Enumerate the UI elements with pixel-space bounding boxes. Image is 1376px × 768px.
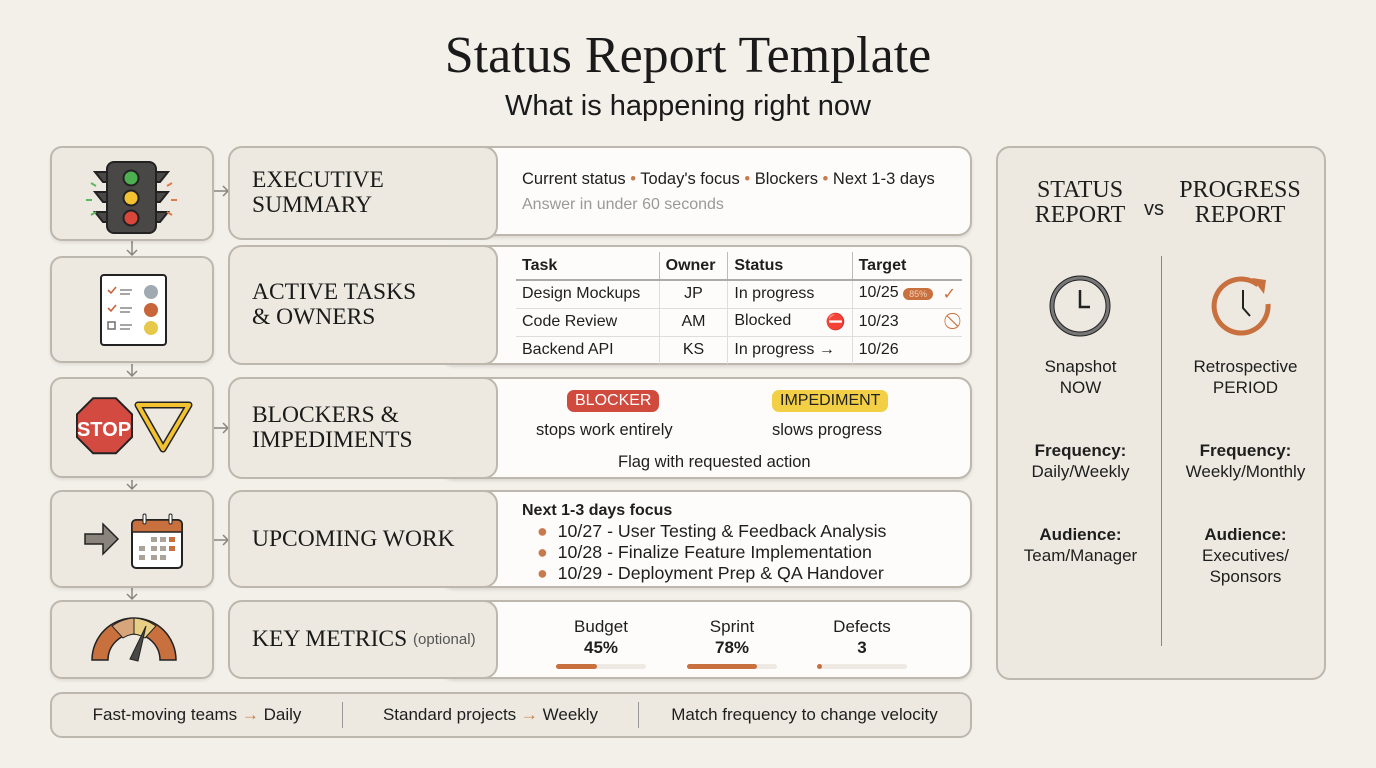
- label: key metrics: (optional): [413, 631, 476, 648]
- icon: checklist: [50, 256, 214, 363]
- metric sprint: 78%: [715, 638, 749, 657]
- content: task table: 10/25 85%: [859, 284, 927, 301]
- label: executive summary: EXECUTIVE: [252, 167, 384, 193]
- impediment badge: IMPEDIMENT: [780, 392, 880, 409]
- content: upcoming list: ● 10/28 - Finalize Feature Implementation: [537, 542, 872, 562]
- content: blockers: stops work entirely: [536, 421, 673, 439]
- text: progress column: [1186, 357, 1306, 586]
- metric budget: [556, 617, 646, 669]
- content: task table: In progress →: [734, 341, 835, 358]
- label: executive summary: [228, 146, 498, 240]
- icon: traffic light: [50, 146, 214, 241]
- metric defects: [817, 617, 907, 669]
- content: upcoming list: [440, 490, 972, 588]
- content: task table: KS: [683, 341, 704, 358]
- content: task table: Status: [734, 256, 783, 274]
- content: executive summary: Current status • Today's focus • Blockers • Next 1-3 days: [522, 170, 935, 188]
- subtitle: What is happening right now: [505, 90, 871, 122]
- title: Status Report Template: [445, 27, 931, 84]
- label: active tasks: & OWNERS: [252, 304, 375, 330]
- content: upcoming list: ● 10/29 - Deployment Prep & QA Handover: [537, 563, 884, 583]
- bottom frequency bar: Standard projects → Weekly: [383, 705, 598, 724]
- content: blockers: slows progress: [772, 421, 882, 439]
- content: task table: AM: [682, 313, 706, 330]
- bottom frequency bar: [50, 692, 972, 738]
- text: status column: NOW: [1060, 378, 1101, 397]
- content: task table: ⛔: [826, 314, 846, 331]
- content: executive summary: Answer in under 60 seconds: [522, 196, 724, 213]
- content: task table: 10/26: [859, 341, 899, 358]
- label: blockers: IMPEDIMENTS: [252, 427, 413, 453]
- label: upcoming work: [228, 490, 498, 588]
- text: progress column: Audience:: [1204, 525, 1287, 544]
- text: status column: Snapshot: [1045, 357, 1116, 376]
- text: status column: Daily/Weekly: [1032, 462, 1129, 481]
- heading: status report: [1035, 177, 1125, 228]
- content: task table: JP: [684, 285, 703, 302]
- text: progress column: Retrospective: [1194, 357, 1297, 376]
- text: status column: Frequency:: [1035, 441, 1126, 460]
- panel: status vs progress: [996, 146, 1326, 680]
- text: progress column: Weekly/Monthly: [1186, 462, 1305, 481]
- text: status column: Audience:: [1039, 525, 1122, 544]
- content: task table: 10/23: [859, 313, 899, 330]
- content: task table: Backend API: [522, 341, 614, 358]
- arrow: [214, 186, 228, 196]
- text: status column: [1024, 357, 1137, 565]
- content: task table: Design Mockups: [522, 285, 640, 302]
- blocker badge: BLOCKER: [575, 392, 651, 409]
- content: task table: ✓: [943, 286, 956, 303]
- bottom frequency bar: Fast-moving teams → Daily: [93, 705, 301, 724]
- label: blockers: BLOCKERS &: [252, 402, 399, 428]
- content: task table: Owner: [666, 256, 715, 274]
- heading: status report: REPORT: [1035, 202, 1125, 228]
- blocker badge: [567, 390, 659, 412]
- heading: progress report: [1179, 177, 1301, 228]
- icon: stop and yield signs: [50, 377, 214, 478]
- label: active tasks: ACTIVE TASKS: [252, 279, 416, 305]
- content: executive summary: [440, 146, 972, 236]
- icon: gauge: [50, 600, 214, 679]
- content: upcoming list: Next 1-3 days focus: [522, 502, 672, 519]
- text: progress column: Sponsors: [1210, 567, 1281, 586]
- icon: arrow + calendar: [50, 490, 214, 588]
- metric sprint: [687, 617, 777, 669]
- content: task table: Target: [859, 256, 906, 274]
- label: upcoming work: UPCOMING WORK: [252, 526, 455, 552]
- metric budget: Budget: [574, 617, 628, 636]
- heading: progress report: REPORT: [1195, 202, 1285, 228]
- metric sprint: Sprint: [710, 617, 754, 636]
- content: task table: Code Review: [522, 313, 617, 330]
- label: blockers: [228, 377, 498, 479]
- text: progress column: Frequency:: [1200, 441, 1291, 460]
- connector arrows between icon boxes: [126, 241, 138, 600]
- heading: status report: STATUS: [1037, 177, 1123, 203]
- content: metrics: [440, 600, 972, 679]
- label: active tasks: [228, 245, 498, 365]
- metric budget: 45%: [584, 638, 618, 657]
- icon: retrospective clock: [1212, 276, 1271, 336]
- content: upcoming list: ● 10/27 - User Testing & Feedback Analysis: [537, 521, 886, 541]
- text: status column: Team/Manager: [1024, 546, 1137, 565]
- content: blockers: [440, 377, 972, 479]
- content: task table: In progress: [734, 285, 814, 302]
- text: progress column: PERIOD: [1213, 378, 1278, 397]
- label: executive summary: SUMMARY: [252, 192, 372, 218]
- arrow: [214, 534, 228, 546]
- arrow: [214, 422, 228, 434]
- heading: progress report: PROGRESS: [1179, 177, 1301, 203]
- content: task table: [440, 245, 972, 365]
- text: progress column: Executives/: [1202, 546, 1289, 565]
- content: task table: Blocked: [734, 312, 791, 329]
- content: blockers: Flag with requested action: [618, 453, 811, 471]
- metric defects: Defects: [833, 617, 891, 636]
- impediment badge: [772, 390, 888, 412]
- panel: status vs progress: vs: [1144, 198, 1164, 220]
- label: key metrics: KEY METRICS: [252, 626, 407, 652]
- metric defects: 3: [857, 638, 867, 657]
- icon: clock: [1050, 276, 1110, 336]
- content: task table: Task: [522, 256, 557, 274]
- icon: stop and yield signs: STOP: [77, 419, 131, 441]
- label: key metrics: [228, 600, 498, 679]
- bottom frequency bar: Match frequency to change velocity: [671, 705, 938, 724]
